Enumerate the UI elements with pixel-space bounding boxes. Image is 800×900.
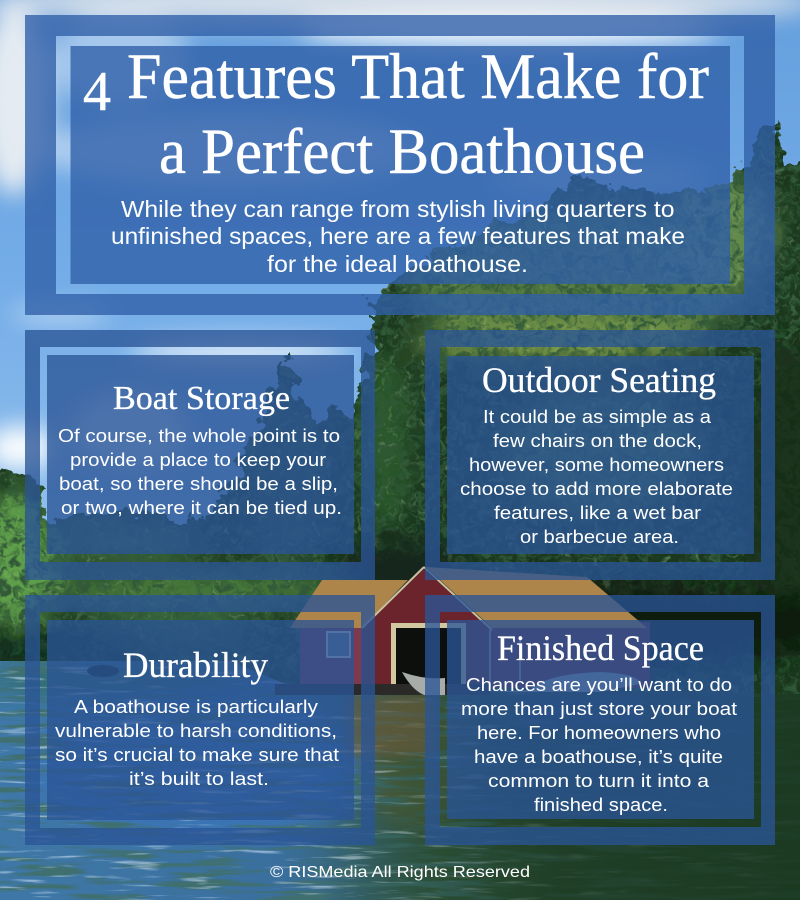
roof trim [362, 567, 492, 630]
durability text: vulnerable to harsh conditions, [55, 720, 337, 741]
water [0, 655, 800, 900]
outdoor seating text: It could be as simple as a [483, 406, 712, 427]
boat storage text: or two, where it can be tied up. [61, 497, 342, 518]
outdoor seating heading: Outdoor Seating [482, 360, 716, 400]
panel: outdoor seating [425, 330, 775, 580]
outdoor seating text: features, like a wet bar [494, 502, 701, 523]
window [327, 632, 350, 657]
right roof [426, 567, 647, 628]
boat storage text: boat, so there should be a slip, [59, 473, 338, 494]
panel: header [25, 15, 775, 315]
finished space text: finished space. [534, 794, 668, 815]
intro text: While they can range from stylish living quarters to [121, 196, 674, 222]
finished space text [461, 674, 737, 815]
panel: boat storage [25, 330, 375, 580]
panel: finished space [425, 595, 775, 845]
boat storage text: provide a place to keep your [70, 449, 326, 470]
right boats [490, 672, 640, 692]
durability text: it’s built to last. [129, 768, 269, 789]
clouds [0, 0, 800, 470]
intro text [111, 196, 685, 277]
durability inner panel [47, 620, 354, 820]
finished space heading: Finished Space [497, 628, 704, 668]
boat storage text: Of course, the whole point is to [58, 425, 340, 446]
finished space text: have a boathouse, it’s quite [474, 746, 723, 767]
finished space text: here. For homeowners who [477, 722, 721, 743]
title: 4 [83, 61, 111, 123]
copyright footer: © RISMedia All Rights Reserved [270, 864, 530, 881]
house reflection [346, 695, 425, 758]
durability heading: Durability [123, 645, 268, 685]
outdoor seating outer ring [425, 330, 775, 580]
outdoor seating text: however, some homeowners [469, 454, 724, 475]
dock [275, 684, 490, 695]
durability text: so it’s crucial to make sure that [55, 744, 339, 765]
outdoor seating inner panel [447, 356, 754, 554]
outdoor seating text: choose to add more elaborate [460, 478, 733, 499]
door [391, 623, 466, 684]
tree mass [0, 100, 800, 700]
right wing posts [490, 630, 520, 686]
right wing wall [480, 622, 650, 688]
header inner panel [70, 46, 730, 284]
outdoor seating text: few chairs on the dock, [493, 430, 702, 451]
finished space text: more than just store your boat [461, 698, 737, 719]
white boat [402, 672, 445, 695]
left wing wall [300, 628, 365, 685]
boat storage inner panel [47, 355, 354, 554]
boathouse [87, 567, 650, 695]
finished space outer ring [425, 595, 775, 845]
durability text [55, 696, 339, 789]
intro text: unfinished spaces, here are a few features that make [111, 223, 685, 249]
durability outer ring [25, 595, 375, 845]
finished space inner panel [447, 620, 754, 819]
panel: durability [25, 595, 375, 845]
durability text: A boathouse is particularly [74, 696, 319, 717]
boat storage outer ring [25, 330, 375, 580]
sky [0, 0, 800, 560]
intro text: for the ideal boathouse. [267, 251, 528, 277]
finished space text: Chances are you’ll want to do [466, 674, 732, 695]
title [83, 41, 709, 188]
outdoor seating text [460, 406, 733, 547]
small boat rock [87, 665, 119, 677]
left roof [290, 580, 408, 628]
main gable wall [362, 569, 490, 686]
finished space text: common to turn it into a [488, 770, 710, 791]
boat storage text [58, 425, 342, 518]
header outer ring [25, 15, 775, 315]
title: Features That Make for [127, 41, 709, 113]
outdoor seating text: or barbecue area. [520, 526, 679, 547]
title: a Perfect Boathouse [159, 116, 645, 188]
boat storage heading: Boat Storage [113, 380, 290, 417]
